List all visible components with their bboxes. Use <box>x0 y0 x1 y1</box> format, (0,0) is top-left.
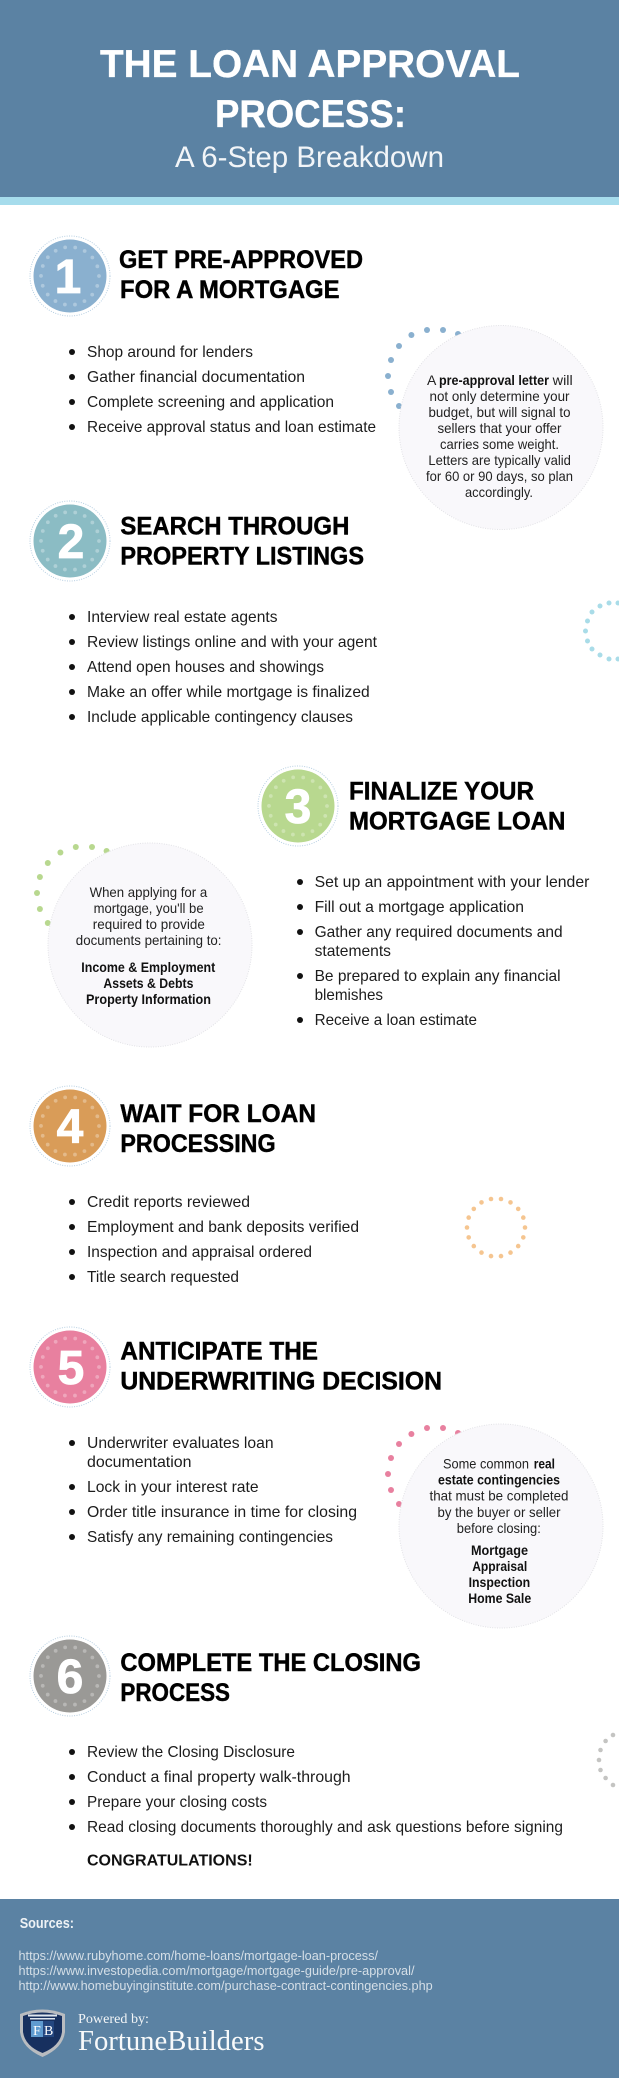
callout: real estate contingencies: Inspection <box>469 1574 530 1590</box>
step 4 badge <box>30 1086 110 1166</box>
step 3 bullet list <box>297 874 590 1029</box>
callout: required documents: Property Information <box>86 991 211 1007</box>
step 6 bullet list: Read closing documents thoroughly and ask questions before signing <box>87 1819 563 1836</box>
footer panel <box>0 1899 619 2078</box>
step 5 heading: UNDERWRITING DECISION <box>120 1368 442 1396</box>
callout: real estate contingencies: that must be completed <box>430 1488 568 1504</box>
step 5 bullet list: Lock in your interest rate <box>87 1479 259 1496</box>
callout: real estate contingencies: Mortgage <box>471 1542 528 1558</box>
powered by wordmark: FortuneBuilders <box>78 2025 264 2057</box>
step 5 bullet list: documentation <box>87 1454 192 1471</box>
step 3 heading: MORTGAGE LOAN <box>349 808 565 836</box>
step 4 bullet list: Title search requested <box>87 1269 239 1286</box>
step 5 heading: ANTICIPATE THE <box>120 1338 318 1366</box>
step 3 bullet list: Be prepared to explain any financial <box>315 968 561 985</box>
callout: real estate contingencies: by the buyer or seller <box>438 1504 561 1520</box>
step 3 bullet list: Receive a loan estimate <box>315 1012 477 1029</box>
step 1 heading <box>119 246 363 304</box>
callout: required documents: documents pertaining to: <box>76 932 222 948</box>
callout: real estate contingencies: before closing: <box>457 1520 541 1536</box>
step 2 bullet list: Review listings online and with your agent <box>87 634 378 651</box>
callout: required documents: Income & Employment <box>81 959 216 975</box>
step 4 heading <box>120 1100 316 1158</box>
step 2 bullet list: Attend open houses and showings <box>87 659 324 676</box>
step 4 heading: PROCESSING <box>120 1130 276 1158</box>
step 1 badge <box>30 236 110 316</box>
step 3 bullet list: blemishes <box>315 987 383 1004</box>
step 2 bullet list: Interview real estate agents <box>87 609 278 626</box>
step 2 heading: SEARCH THROUGH <box>120 513 349 541</box>
callout: real estate contingencies: Appraisal <box>472 1558 527 1574</box>
sources heading: Sources: <box>20 1915 74 1932</box>
callout: required documents: Assets & Debts <box>103 975 194 991</box>
step 5 badge <box>30 1327 110 1407</box>
source links <box>18 1948 433 1993</box>
step 2 bullet list: Include applicable contingency clauses <box>87 709 353 726</box>
callout: required documents: required to provide <box>93 916 205 932</box>
callout: required documents <box>48 843 252 1047</box>
step 5 bullet list: Satisfy any remaining contingencies <box>87 1529 333 1546</box>
dotted arc: step 1 <box>385 327 461 409</box>
source links: https://www.rubyhome.com/home-loans/mortgage-loan-process/ <box>18 1948 378 1963</box>
step 4 bullet list: Employment and bank deposits verified <box>87 1219 359 1236</box>
subtitle: A 6-Step Breakdown <box>175 141 444 174</box>
step 6 heading <box>120 1649 421 1707</box>
step 1 bullet list: Gather financial documentation <box>87 369 305 386</box>
step 1 bullet list: Shop around for lenders <box>87 344 253 361</box>
callout: real estate contingencies: estate contingencies <box>438 1472 560 1488</box>
callout: required documents: When applying for a <box>90 884 207 900</box>
step 4 bullet list: Credit reports reviewed <box>87 1194 250 1211</box>
dotted arc: step 2 <box>583 600 619 662</box>
callout: pre-approval letter: pre-approval letter <box>439 372 549 388</box>
step 3 bullet list: statements <box>315 943 391 960</box>
callout: pre-approval letter: for 60 or 90 days, so plan <box>426 468 573 484</box>
callout: pre-approval letter: A <box>427 372 437 388</box>
dotted arc: step 5 <box>385 1425 461 1507</box>
step 1 bullet list: Receive approval status and loan estimate <box>87 419 376 436</box>
callout: pre-approval letter: carries some weight. <box>440 436 559 452</box>
title <box>100 43 520 136</box>
dotted arc: step 6 <box>597 1733 615 1787</box>
step 6 bullet list: Prepare your closing costs <box>87 1794 267 1811</box>
step 1 bullet list <box>69 344 376 436</box>
step 3 badge: 3 <box>285 781 311 834</box>
step 3 heading: FINALIZE YOUR <box>349 778 534 806</box>
callout: pre-approval letter: sellers that your offer <box>438 420 562 436</box>
step 3 bullet list: Fill out a mortgage application <box>315 899 524 916</box>
step 1 badge: 1 <box>55 251 81 304</box>
congratulations text: CONGRATULATIONS! <box>87 1852 253 1869</box>
callout: real estate contingencies: Home Sale <box>468 1590 531 1606</box>
callout: real estate contingencies: real <box>534 1456 555 1472</box>
step 1 bullet list: Complete screening and application <box>87 394 334 411</box>
step 1 heading: GET PRE-APPROVED <box>119 246 363 274</box>
callout: pre-approval letter: Letters are typically valid <box>428 452 571 468</box>
step 6 heading: COMPLETE THE CLOSING <box>120 1649 421 1677</box>
step 5 bullet list <box>69 1435 357 1546</box>
step 6 bullet list: Review the Closing Disclosure <box>87 1744 295 1761</box>
step 5 bullet list: Underwriter evaluates loan <box>87 1435 274 1452</box>
callout: pre-approval letter: budget, but will signal to <box>428 404 571 420</box>
step 3 badge <box>258 766 338 846</box>
step 4 badge: 4 <box>57 1101 84 1154</box>
title: PROCESS: <box>215 93 406 136</box>
step 3 heading <box>349 778 565 836</box>
step 4 heading: WAIT FOR LOAN <box>120 1100 316 1128</box>
dotted ring: step 4 <box>465 1197 527 1258</box>
callout: pre-approval letter: will <box>552 372 573 388</box>
callout: required documents: mortgage, you'll be <box>94 900 204 916</box>
step 5 heading <box>120 1338 442 1396</box>
callout: pre-approval letter: accordingly. <box>465 484 533 500</box>
step 2 bullet list: Make an offer while mortgage is finalized <box>87 684 370 701</box>
step 1 heading: FOR A MORTGAGE <box>120 276 340 304</box>
callout: pre-approval letter <box>399 326 603 530</box>
step 2 badge: 2 <box>58 516 84 569</box>
step 2 heading: PROPERTY LISTINGS <box>120 543 364 571</box>
header banner <box>0 0 619 205</box>
step 6 badge: 6 <box>57 1651 83 1704</box>
icon: FortuneBuilders shield logo: F <box>33 2024 41 2039</box>
icon: FortuneBuilders shield logo: B <box>44 2024 53 2039</box>
icon: FortuneBuilders shield logo <box>20 2010 65 2057</box>
step 2 badge <box>30 501 110 581</box>
step 4 bullet list <box>69 1194 359 1286</box>
dotted arc: step 3 <box>34 844 110 926</box>
title: THE LOAN APPROVAL <box>100 43 520 86</box>
source links: http://www.homebuyinginstitute.com/purchase-contract-contingencies.php <box>18 1978 433 1993</box>
callout: real estate contingencies: Some common <box>443 1456 529 1472</box>
step 6 badge <box>30 1636 110 1716</box>
step 5 badge: 5 <box>58 1342 84 1395</box>
step 6 heading: PROCESS <box>120 1679 230 1707</box>
step 2 heading <box>120 513 364 571</box>
callout: real estate contingencies <box>399 1424 603 1628</box>
step 6 bullet list <box>69 1744 563 1836</box>
step 4 bullet list: Inspection and appraisal ordered <box>87 1244 312 1261</box>
step 6 bullet list: Conduct a final property walk-through <box>87 1769 351 1786</box>
step 3 bullet list: Set up an appointment with your lender <box>315 874 590 891</box>
step 5 bullet list: Order title insurance in time for closing <box>87 1504 357 1521</box>
powered by wordmark: Powered by: <box>78 2012 149 2027</box>
step 2 bullet list <box>69 609 378 726</box>
source links: https://www.investopedia.com/mortgage/mortgage-guide/pre-approval/ <box>18 1963 415 1978</box>
callout: pre-approval letter: not only determine your <box>430 388 570 404</box>
step 3 bullet list: Gather any required documents and <box>315 924 563 941</box>
